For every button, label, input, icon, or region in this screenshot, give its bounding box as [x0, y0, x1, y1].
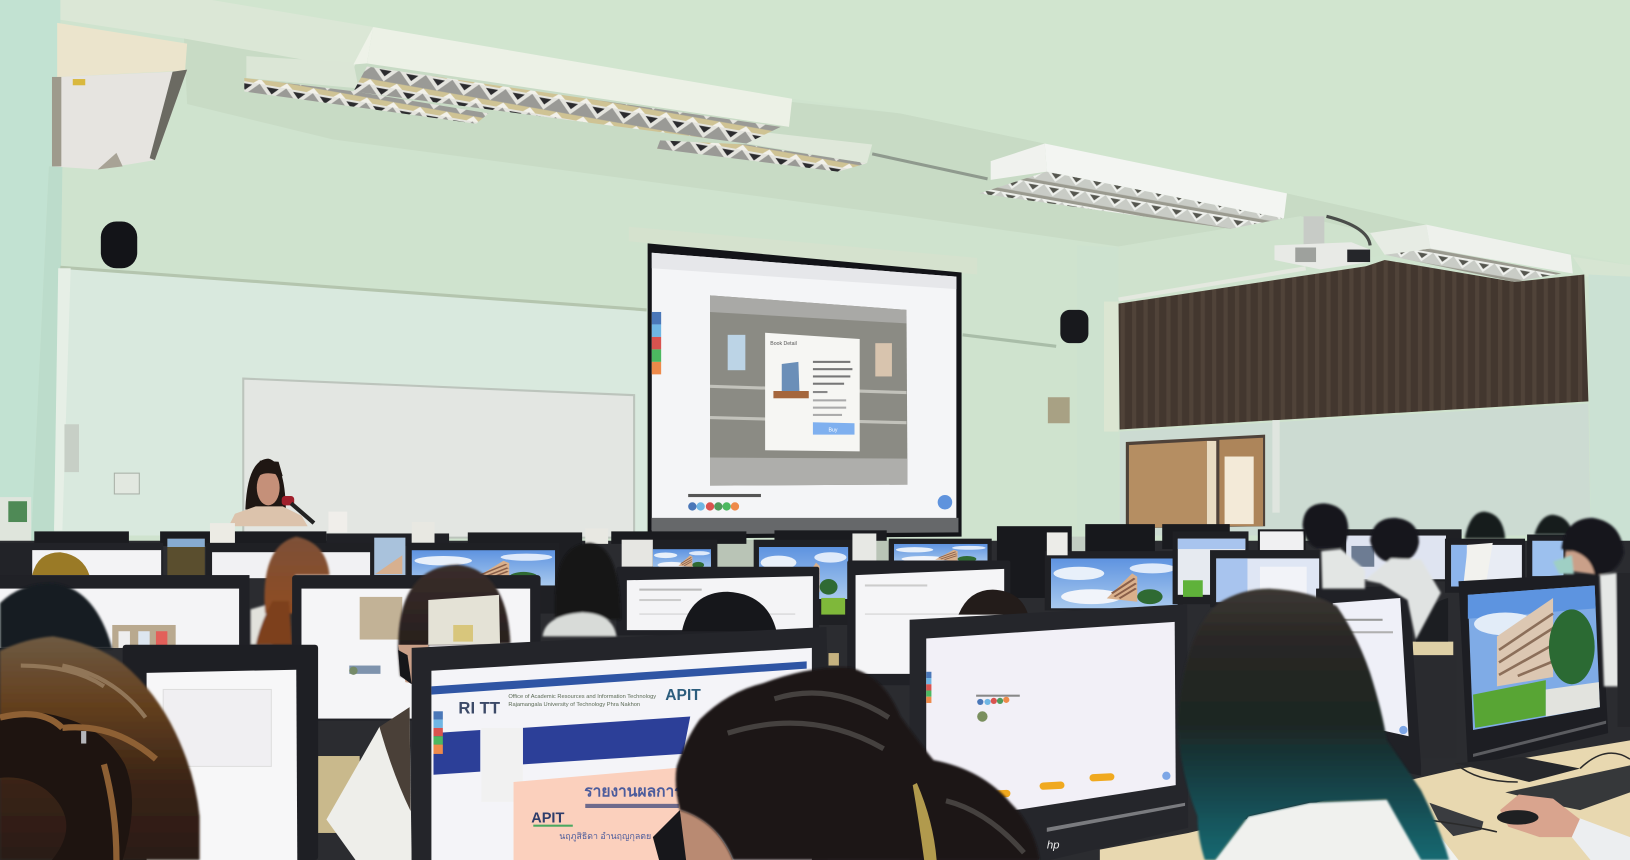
monitor: right, campus picture — [1458, 573, 1608, 766]
conduit — [872, 154, 988, 179]
student: long hair with paper — [326, 565, 510, 860]
social row — [688, 494, 761, 511]
card: black monitor — [1047, 532, 1068, 555]
site header text: Rajamangala University of Technology Phra Nakhon — [508, 702, 640, 708]
chat button — [938, 495, 952, 510]
mouse — [1497, 810, 1539, 825]
student: teal hair — [1178, 589, 1458, 860]
orange buttons — [987, 773, 1115, 798]
desk cables — [1351, 753, 1630, 832]
book thumbnails — [728, 335, 745, 370]
share buttons — [926, 672, 931, 703]
bookshelf panel — [710, 295, 908, 486]
share buttons — [652, 312, 661, 374]
article avatars — [976, 695, 1020, 722]
dropdown menu — [481, 728, 523, 802]
desk behind front monitors — [318, 756, 360, 833]
site header text: Office of Academic Resources and Information Technology — [508, 694, 656, 700]
dark acoustic wall panel — [1119, 260, 1588, 429]
chair — [1416, 598, 1448, 642]
presenter — [229, 459, 314, 526]
student: dark head left — [0, 583, 112, 649]
door — [1126, 420, 1280, 528]
sleeve — [1572, 818, 1630, 860]
air conditioner — [52, 23, 187, 170]
desk surface right — [1100, 740, 1630, 860]
panel: lower wall board — [54, 267, 1056, 536]
dialog: book detail: Buy — [829, 428, 838, 434]
student: head centre — [682, 592, 777, 631]
share buttons — [433, 711, 443, 754]
monitor: HP all-in-one: hp — [1047, 840, 1060, 852]
projector — [1274, 216, 1370, 269]
monitors: back row — [34, 524, 1305, 598]
site header text — [458, 687, 701, 717]
cabinet — [1414, 656, 1456, 758]
monitor: row three left — [0, 575, 249, 648]
speaker: left — [101, 221, 137, 268]
taskbar — [652, 518, 958, 535]
site header text: APIT — [665, 687, 701, 704]
monitor: right edge — [1618, 573, 1630, 727]
whiteboard — [243, 379, 634, 538]
monitor: row three far right (white screen) — [1316, 585, 1421, 776]
wall gaps between monitors — [717, 537, 1112, 568]
monitor: row four left — [123, 645, 318, 860]
dark base behind desks — [0, 541, 1630, 860]
poster: รายงานผลการ — [584, 784, 683, 801]
student: head right of centre — [958, 590, 1028, 615]
monitor: HP all-in-one — [910, 604, 1188, 860]
card on row two — [622, 540, 653, 567]
monitor: row three centre — [616, 567, 819, 635]
speaker: right — [1060, 310, 1088, 343]
student: front black hair — [653, 667, 1040, 860]
site header text: RI TT — [458, 698, 500, 717]
monitor: row three right — [847, 561, 1010, 685]
ceiling light: right — [979, 144, 1287, 229]
desk segment behind — [1413, 642, 1453, 655]
keyboard: right — [1505, 765, 1630, 810]
hand on mouse — [1500, 794, 1580, 837]
student: orange hair — [251, 537, 330, 645]
card: right of centre — [852, 533, 876, 562]
student: brown hair front left — [0, 636, 200, 860]
monitors: second row — [0, 529, 1567, 625]
monitor: website on front screen — [412, 627, 827, 860]
wall controls — [0, 397, 1070, 551]
desk name cards — [210, 512, 608, 544]
dialog: book detail — [765, 333, 860, 451]
ceiling light: main — [244, 27, 872, 172]
poster: นฤภูสิธิดา อำนฤญกุลตย — [559, 831, 651, 842]
student: yellow hair head — [32, 552, 89, 575]
desk patch between monitors — [829, 653, 839, 666]
monitor stand — [1455, 757, 1580, 782]
back wall lower — [1120, 403, 1590, 536]
monitor: row three centre left — [292, 575, 541, 721]
projection screen — [629, 227, 977, 539]
student: centre back with shirt — [543, 543, 621, 636]
students: right background — [1303, 503, 1624, 686]
dialog: book detail: Book Detail — [770, 341, 797, 347]
keyboard: small — [1429, 803, 1483, 836]
poster — [514, 764, 717, 860]
ceiling light: far right — [1370, 225, 1573, 282]
poster: APIT — [531, 811, 564, 827]
